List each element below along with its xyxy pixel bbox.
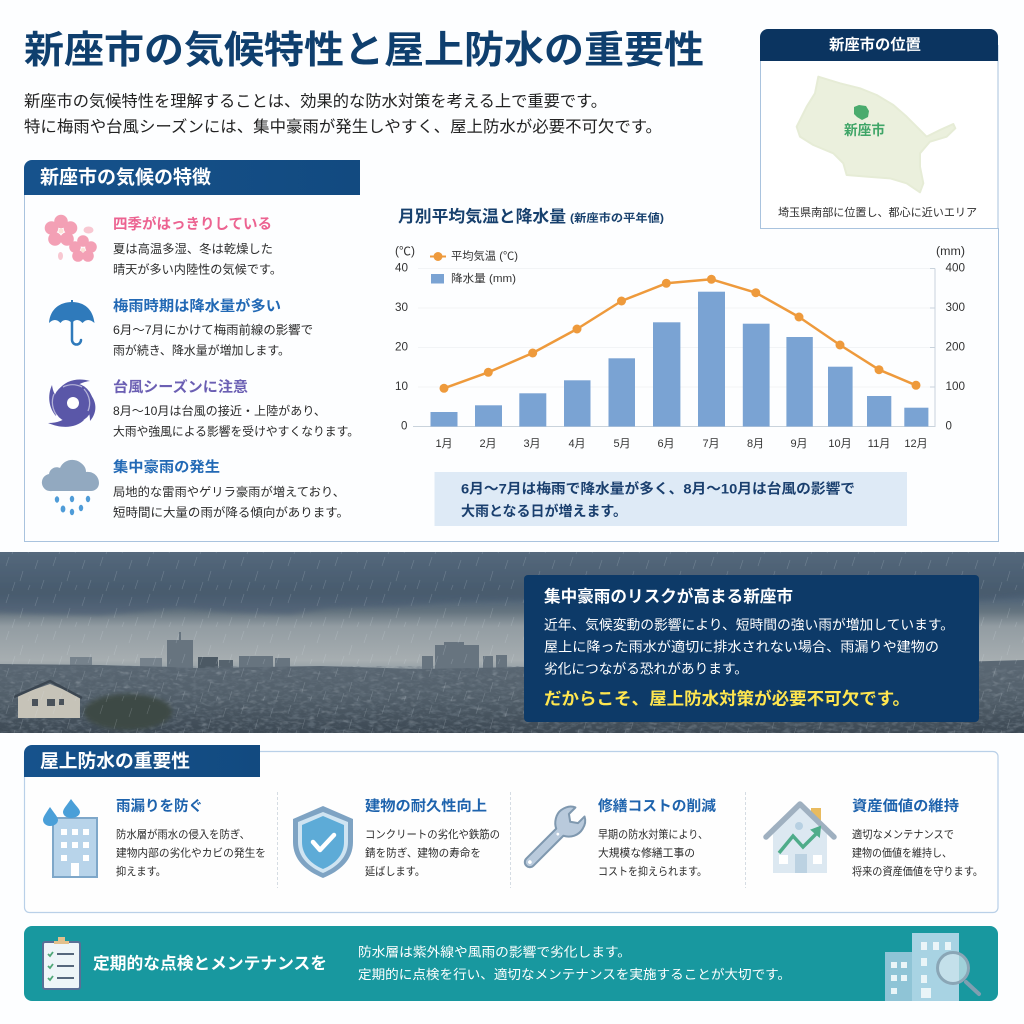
benefit: asset value [766,797,983,878]
icon: rain cloud [42,460,99,515]
icon: buildings and magnifier [885,933,979,1001]
description: 錆を防ぎ、建物の寿命を [365,846,481,860]
description: 建物内部の劣化やカビの発生を [116,846,266,860]
icon: wrench [516,802,590,876]
heading: 梅雨時期は降水量が多い [113,297,281,315]
chart legend [430,248,518,285]
right axis labels [936,246,965,432]
description: 短時間に大量の雨が降る傾向があります。 [113,504,349,520]
foreground house [14,681,82,718]
month labels: 4月 [568,438,586,450]
description: 抑えます。 [116,864,166,878]
chart legend: 降水量 (mm) [451,271,516,285]
description: 雨が続き、降水量が増加します。 [113,342,290,358]
callout emphasis: だからこそ、屋上防水対策が必要不可欠です。 [544,688,910,708]
location heading: 新座市の位置 [829,36,921,54]
intro text: 新座市の気候特性を理解することは、効果的な防水対策を考える上で重要です。 [24,92,607,110]
icon: checklist clipboard [43,937,80,989]
description: 大雨や強風による影響を受けやすくなります。 [113,424,359,438]
right axis labels: 300 [946,302,965,314]
benefit: durability [293,797,500,878]
callout body [544,618,954,676]
right axis labels: (mm) [936,246,965,258]
left axis labels [395,246,415,432]
description: コストを抑えられます。 [598,864,707,878]
feature: four seasons [45,215,282,276]
month labels: 6月 [657,438,675,450]
description: 6月〜7月にかけて梅雨前線の影響で [113,322,313,337]
left axis labels: 10 [395,381,408,393]
chart title: (新座市の平年値) [570,210,664,224]
month labels: 2月 [479,438,497,450]
left axis labels: 20 [395,342,408,354]
heading: 建物の耐久性向上 [365,797,487,815]
month labels: 3月 [523,438,541,450]
heading: 四季がはっきりしている [113,215,272,233]
description: 局地的な雷雨やゲリラ豪雨が増えており、 [113,484,345,499]
callout body: 近年、気候変動の影響により、短時間の強い雨が増加しています。 [544,618,954,632]
icon: cherry blossoms [45,215,97,262]
month labels: 1月 [435,438,453,450]
panel: climate frame [24,190,998,542]
icon: shield with check [293,806,353,878]
description: 早期の防水対策により、 [598,827,708,841]
intro text [24,92,662,136]
left axis labels: 0 [401,420,407,432]
feature: rainy season [49,297,313,358]
description: 夏は高温多湿、冬は乾燥した [113,241,273,256]
panel: location [760,29,998,228]
description [598,827,708,878]
combo chart: temperature and precipitation [395,246,965,450]
description: 大規模な修繕工事の [598,846,695,860]
month labels: 10月 [828,438,852,450]
right axis labels: 100 [946,381,965,393]
banner text [358,944,791,982]
distant buildings [70,632,507,669]
feature: typhoon [48,378,359,438]
month labels: 7月 [702,438,720,450]
chart legend: 平均気温 (℃) [451,248,518,262]
feature: heavy rain [42,458,349,520]
panel header: climate: 新座市の気候の特徴 [40,166,211,188]
description: 延ばします。 [365,865,425,878]
description [113,322,313,358]
description: 8月〜10月は台風の接近・上陸があり、 [113,403,326,418]
description [852,827,983,878]
title: 新座市の気候特性と屋上防水の重要性 [24,30,704,72]
chart title [398,207,664,226]
month labels: 12月 [904,438,928,450]
description [116,827,266,878]
icon: house with rising chart [766,804,834,873]
description: 防水層が雨水の侵入を防ぎ、 [116,827,250,841]
left axis labels: (℃) [395,246,415,258]
callout: heavy rain risk [524,575,979,722]
right axis labels: 200 [946,342,965,354]
photo band: rainy city skyline [0,540,1024,733]
temperature line [440,275,920,393]
chart callout: 大雨となる日が増えます。 [461,503,627,519]
callout body: 劣化につながる恐れがあります。 [544,662,748,676]
heading: 集中豪雨の発生 [113,458,220,476]
heading: 台風シーズンに注意 [113,378,249,396]
benefit: cost reduction [516,797,717,878]
panel header: 屋上防水の重要性 [40,750,190,772]
right axis labels: 400 [946,262,965,274]
location caption: 埼玉県南部に位置し、都心に近いエリア [778,205,977,219]
heading: 雨漏りを防ぐ [116,797,203,815]
description [113,484,349,520]
month labels: 5月 [613,438,631,450]
icon: typhoon [48,379,95,427]
intro text: 特に梅雨や台風シーズンには、集中豪雨が発生しやすく、屋上防水が必要不可欠です。 [24,118,662,136]
left axis labels: 40 [395,262,408,274]
chart callout: 6月〜7月は梅雨で降水量が多く、8月〜10月は台風の影響で [461,480,855,496]
precipitation bars [430,292,928,426]
map label: 新座市 [844,122,885,138]
heading: 資産価値の維持 [852,797,960,815]
description [365,827,500,878]
description: 適切なメンテナンスで [852,827,954,841]
benefit: prevent leaks [43,797,266,878]
foreground trees [84,694,172,730]
banner text: 定期的に点検を行い、適切なメンテナンスを実施することが大切です。 [358,967,791,982]
left axis labels: 30 [395,302,408,314]
description: 晴天が多い内陸性の気候です。 [113,262,282,276]
description: 建物の価値を維持し、 [852,846,952,860]
month labels: 11月 [868,438,890,450]
map of Saitama [797,77,955,192]
callout heading: 集中豪雨のリスクが高まる新座市 [544,586,793,606]
banner heading: 定期的な点検とメンテナンスを [93,954,327,973]
right axis labels: 0 [946,420,952,432]
chart title: 月別平均気温と降水量 [398,207,566,226]
description [113,403,359,438]
panel header: climate [24,160,360,195]
chart callout [434,472,907,526]
description: 将来の資産価値を守ります。 [852,864,983,878]
icon: building with raindrops [43,799,97,877]
banner text: 防水層は紫外線や風雨の影響で劣化します。 [358,944,631,960]
icon: umbrella [49,300,94,344]
callout body: 屋上に降った雨水が適切に排水されない場合、雨漏りや建物の [544,640,939,654]
panel: importance of waterproofing [24,745,998,912]
description: コンクリートの劣化や鉄筋の [365,827,500,841]
month labels: 8月 [747,438,764,450]
panel header [24,745,260,777]
location header [760,29,998,61]
rain streaks [0,552,1024,733]
month labels [435,438,928,450]
banner: regular inspection [24,926,998,1001]
month labels: 9月 [790,438,808,450]
heading: 修繕コストの削減 [598,797,717,815]
description [113,241,282,276]
